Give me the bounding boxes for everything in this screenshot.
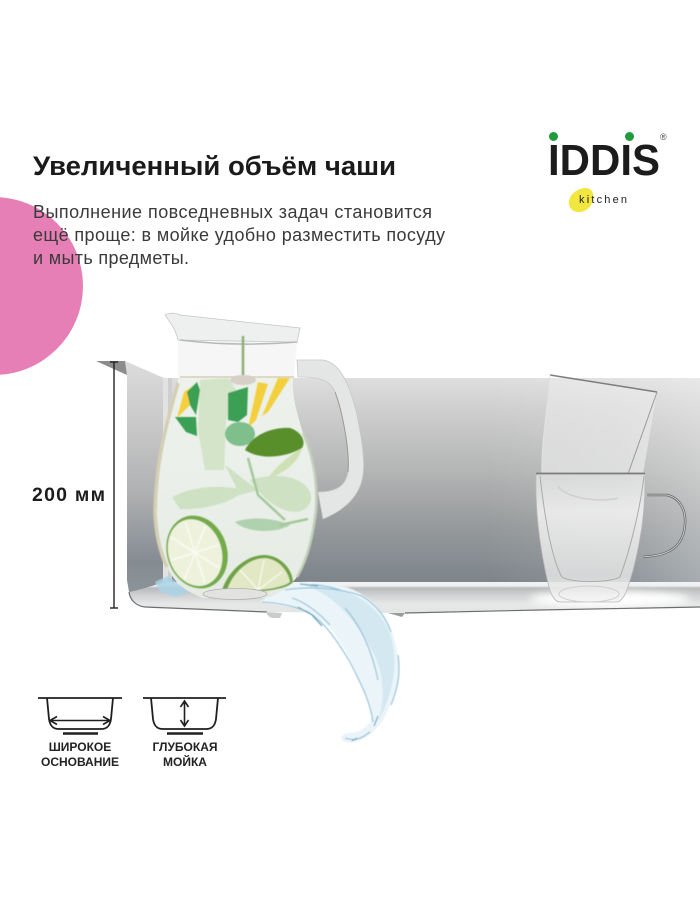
small lime slice: [222, 555, 293, 592]
dark green leaves: [175, 382, 248, 436]
logo: IDDIS kitchen: [548, 132, 667, 212]
dimension line: [110, 362, 118, 608]
lemon slices: [177, 378, 290, 428]
back wall: [163, 378, 700, 583]
pitcher base: [203, 588, 267, 600]
body text: ещё проще: в мойке удобно разместить посуду: [33, 225, 445, 245]
icon label: wide base: [41, 740, 119, 769]
glass pitcher with lime and mint: [155, 313, 364, 600]
pitcher neck: [178, 340, 297, 378]
stacked glass mugs: [536, 375, 685, 602]
pink circle: [0, 197, 83, 375]
icon label: deep sink: [153, 740, 217, 769]
body text: [33, 202, 445, 268]
lower mug: [536, 473, 645, 602]
icon: wide base sink: [38, 698, 122, 734]
mint leaf: [225, 422, 255, 446]
pitcher rim and spout: [165, 313, 300, 342]
large lime slice: [157, 508, 237, 596]
lime wedge: [245, 428, 304, 457]
drain bumps: [266, 612, 282, 618]
floating flowers: [230, 375, 256, 385]
logo: IDDIS kitchen: kitchen: [579, 194, 629, 206]
icon label: wide base: ШИРОКОЕ: [49, 740, 111, 754]
icon label: wide base: ОСНОВАНИЕ: [41, 755, 119, 769]
pitcher body: [155, 340, 316, 598]
pale submerged leaves: [172, 465, 311, 531]
top flange: [96, 361, 127, 375]
body text: и мыть предметы.: [33, 248, 189, 268]
leaf stems: [248, 458, 308, 525]
upper mug: [542, 375, 657, 474]
icon: deep sink: [143, 698, 226, 734]
logo: IDDIS kitchen: ®: [660, 132, 667, 142]
icon label: deep sink: МОЙКА: [163, 754, 207, 769]
pitcher handle: [297, 360, 364, 519]
title: Увеличенный объём чаши: [33, 151, 396, 181]
left wall: [125, 361, 164, 598]
sink cutaway: [96, 361, 700, 618]
pale upper leaves: [198, 378, 240, 470]
mug handle: [643, 495, 685, 557]
sink floor: [129, 582, 700, 613]
mint stem: [242, 336, 244, 375]
logo: IDDIS kitchen: IDDIS: [548, 136, 660, 185]
water splash: [155, 576, 399, 743]
sink outline: [129, 592, 700, 613]
dimension label: 200 мм: [32, 484, 105, 506]
icon label: deep sink: ГЛУБОКАЯ: [153, 740, 217, 754]
body text: Выполнение повседневных задач становится: [33, 202, 432, 222]
